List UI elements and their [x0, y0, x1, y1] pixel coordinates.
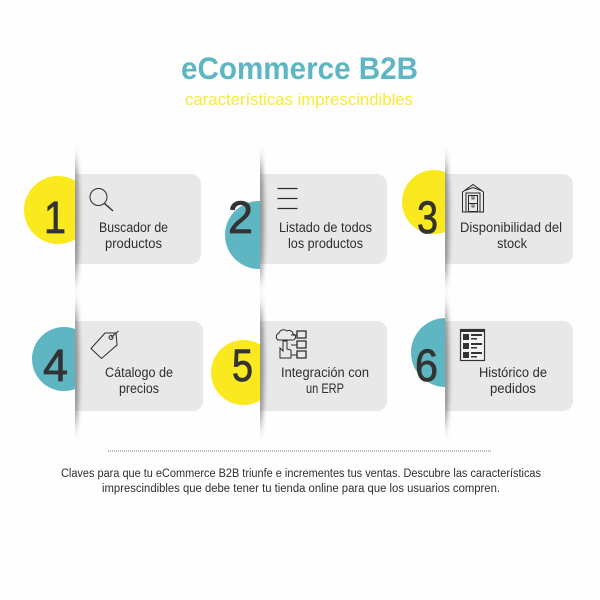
card 1	[75, 174, 201, 264]
card 2	[260, 174, 387, 264]
panel: 4 catalogo de precios	[32, 304, 203, 428]
icon: ERP network	[276, 330, 306, 358]
icon: price tag	[91, 331, 118, 358]
label 6: Histórico de	[479, 365, 547, 380]
label 2: los productos	[288, 236, 363, 251]
label 2	[279, 220, 372, 251]
label 3: Disponibilidad del	[460, 220, 562, 235]
title: eCommerce B2B	[181, 50, 418, 86]
number 4: 4	[43, 340, 68, 391]
panel: 3 disponibilidad del stock	[402, 158, 573, 282]
number 1: 1	[44, 192, 66, 243]
label 3	[460, 220, 562, 251]
number 3: 3	[417, 192, 438, 243]
panel: 2 listado de todos los productos	[225, 158, 387, 282]
fold shadow 3	[441, 158, 449, 282]
card 3	[445, 174, 573, 264]
label 4: Cátalogo de	[105, 365, 173, 380]
icon: order history	[460, 329, 485, 360]
subtitle: características imprescindibles	[185, 91, 413, 109]
icon: list lines	[278, 188, 298, 208]
icon: magnifier	[90, 188, 113, 211]
fold shadow 2	[256, 158, 264, 282]
fold shadow 4	[71, 304, 79, 428]
card 6	[445, 321, 573, 411]
number circle 1	[24, 176, 75, 244]
label 2: Listado de todos	[279, 220, 372, 235]
label 3: stock	[497, 236, 527, 251]
label 5: Integración con	[281, 365, 369, 380]
number circle 4	[32, 327, 75, 391]
label 5: un ERP	[306, 381, 344, 396]
number 6: 6	[415, 340, 438, 391]
label 1: productos	[105, 236, 162, 251]
panel: 6 historico de pedidos	[411, 304, 573, 428]
fold shadow 6	[441, 304, 449, 428]
description text: Claves para que tu eCommerce B2B triunfe e incrementes tus ventas. Descubre las características	[61, 468, 541, 480]
label 1: Buscador de	[99, 220, 168, 235]
description text	[61, 468, 541, 495]
panel: 1 buscador de productos	[24, 158, 201, 282]
number 2: 2	[228, 192, 253, 243]
fold shadow 1	[71, 158, 79, 282]
number circle 6	[411, 318, 445, 387]
card 4	[75, 321, 203, 411]
label 6: pedidos	[490, 381, 536, 396]
card 5	[260, 321, 387, 411]
label 6	[479, 365, 547, 396]
label 1	[99, 220, 168, 251]
number 5: 5	[232, 340, 253, 391]
label 4: precios	[119, 381, 159, 396]
description text: imprescindibles que debe tener tu tienda online para que los usuarios compren.	[102, 483, 500, 495]
number circle 3	[402, 170, 445, 234]
number circle 2	[225, 201, 260, 269]
number circle 5	[211, 340, 260, 405]
icon: warehouse	[462, 184, 484, 212]
label 4	[105, 365, 173, 396]
fold shadow 5	[256, 304, 264, 428]
label 5	[281, 365, 369, 396]
panel: 5 integracion con un ERP	[211, 304, 387, 428]
